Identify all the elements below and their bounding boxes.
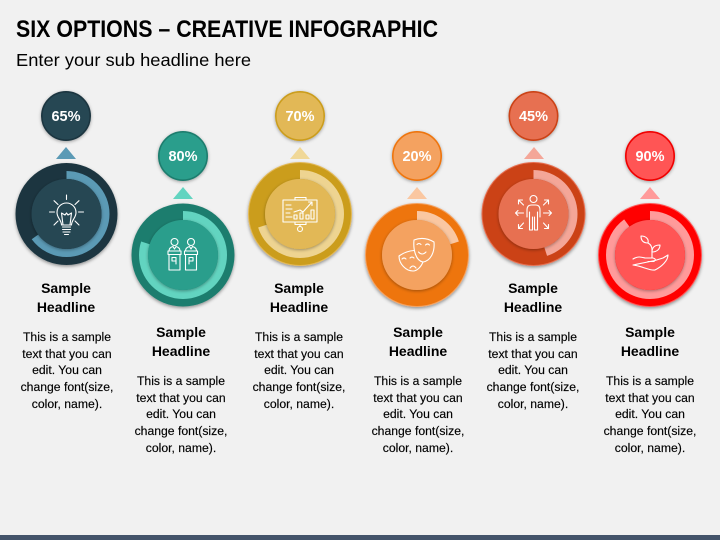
headline: Sample xyxy=(41,280,91,296)
body text: This is a sample xyxy=(606,374,694,388)
body text: color, name). xyxy=(383,441,453,455)
headline: Sample xyxy=(393,324,443,340)
body text: text that you can xyxy=(373,391,463,405)
percentage badge 45% xyxy=(509,92,558,140)
icon: two speakers at podiums xyxy=(168,238,198,270)
headline: Headline xyxy=(270,299,328,315)
body text: change font(size, xyxy=(135,424,227,438)
body text: text that you can xyxy=(605,391,695,405)
option 4: 20% xyxy=(366,132,468,455)
percentage badge 70%: 70% xyxy=(285,109,315,125)
headline: Headline xyxy=(389,343,447,359)
headline: Headline xyxy=(152,343,210,359)
option 3: 70% xyxy=(248,92,352,411)
icon: person with outward arrows xyxy=(516,196,552,230)
body text: This is a sample xyxy=(374,374,462,388)
percentage badge 70% xyxy=(276,92,324,140)
body text: edit. You can xyxy=(146,407,216,421)
subtitle: Enter your sub headline here xyxy=(16,50,251,70)
icon: light bulb xyxy=(50,195,84,234)
triangle pointer xyxy=(640,187,660,199)
body text: change font(size, xyxy=(487,380,579,394)
body text: color, name). xyxy=(264,397,334,411)
body text: color, name). xyxy=(615,441,685,455)
body text: This is a sample xyxy=(255,330,343,344)
body text: This is a sample xyxy=(489,330,577,344)
option 6: 90% xyxy=(598,132,702,455)
option 2: 80% xyxy=(132,132,234,455)
triangle pointer xyxy=(290,147,310,159)
percentage badge 90% xyxy=(626,132,674,180)
donut gauge xyxy=(248,162,352,266)
triangle pointer xyxy=(524,147,544,159)
icon: hand holding a plant xyxy=(633,236,668,270)
icon: theatre masks xyxy=(399,238,434,271)
body text: edit. You can xyxy=(264,363,334,377)
percentage badge 80%: 80% xyxy=(168,149,198,165)
body text: change font(size, xyxy=(21,380,113,394)
body text: change font(size, xyxy=(604,424,696,438)
donut gauge xyxy=(132,204,234,306)
bottom bar xyxy=(0,535,720,540)
option 5: 45% xyxy=(482,92,585,411)
option 1: 65% xyxy=(16,92,118,411)
headline: Sample xyxy=(274,280,324,296)
body text: change font(size, xyxy=(372,424,464,438)
body text: color, name). xyxy=(32,397,102,411)
percentage badge 20% xyxy=(393,132,441,180)
percentage badge 65% xyxy=(42,92,90,140)
donut gauge xyxy=(598,204,702,306)
body text: text that you can xyxy=(136,391,226,405)
donut gauge xyxy=(482,162,585,266)
triangle pointer xyxy=(56,147,76,159)
headline: Headline xyxy=(504,299,562,315)
headline: Sample xyxy=(625,324,675,340)
headline: Sample xyxy=(156,324,206,340)
headline: Headline xyxy=(621,343,679,359)
percentage badge 20%: 20% xyxy=(402,149,432,165)
body text: This is a sample xyxy=(23,330,111,344)
body text: edit. You can xyxy=(615,407,685,421)
donut gauge xyxy=(16,163,118,265)
body text: color, name). xyxy=(498,397,568,411)
body text: text that you can xyxy=(254,347,344,361)
percentage badge 45%: 45% xyxy=(519,109,548,125)
body text: edit. You can xyxy=(32,363,102,377)
headline: Headline xyxy=(37,299,95,315)
triangle pointer xyxy=(407,187,427,199)
body text: This is a sample xyxy=(137,374,225,388)
percentage badge 90%: 90% xyxy=(635,149,665,165)
body text: change font(size, xyxy=(253,380,345,394)
percentage badge 65%: 65% xyxy=(51,109,81,125)
headline: Sample xyxy=(508,280,558,296)
triangle pointer xyxy=(173,187,193,199)
body text: text that you can xyxy=(22,347,112,361)
title: SIX OPTIONS – CREATIVE INFOGRAPHIC xyxy=(16,16,438,43)
body text: color, name). xyxy=(146,441,216,455)
body text: edit. You can xyxy=(383,407,453,421)
icon: presentation board with chart xyxy=(283,198,317,232)
body text: edit. You can xyxy=(498,363,568,377)
body text: text that you can xyxy=(488,347,578,361)
donut gauge xyxy=(366,204,468,306)
percentage badge 80% xyxy=(159,132,207,180)
